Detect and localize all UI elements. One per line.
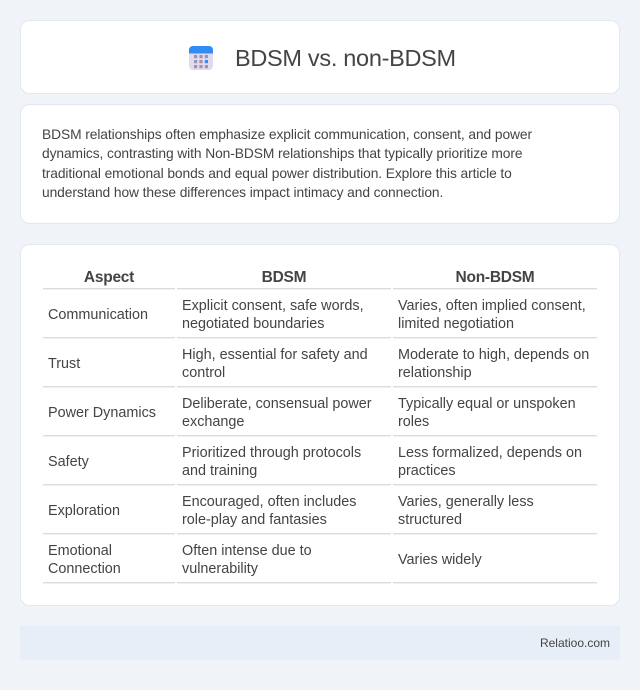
panel: table card [20,244,620,606]
comparison table: vulnerability [182,561,258,577]
comparison table [43,269,597,584]
header: Non-BDSM: Non-BDSM [456,269,534,286]
comparison table: Often intense due to [182,543,312,559]
intro text [42,127,532,200]
title: BDSM vs. non-BDSM [235,45,456,71]
header: Aspect: Aspect [84,269,134,286]
comparison table: Varies widely [398,552,482,568]
footer text: Relatioo.com [540,636,610,650]
comparison table: control [182,365,225,381]
comparison table: Varies, often implied consent, [398,298,586,314]
row: Power Dynamics: Power Dynamics [48,405,156,421]
panel: intro [20,104,620,224]
comparison table: negotiated boundaries [182,316,324,332]
intro text: traditional emotional bonds and equal power distribution. Explore this article to [42,166,512,181]
header: BDSM: BDSM [262,269,306,286]
row: Emotional Connection: Emotional [48,543,112,559]
intro text: dynamics, contrasting with Non-BDSM relationships that typically prioritize more [42,146,522,161]
panel: title card [20,20,620,94]
comparison table: Explicit consent, safe words, [182,298,364,314]
comparison table: structured [398,512,462,528]
comparison table: exchange [182,414,244,430]
comparison table: Prioritized through protocols [182,445,361,461]
comparison table: practices [398,463,456,479]
comparison table: Encouraged, often includes [182,494,356,510]
comparison table: Varies, generally less [398,494,534,510]
footer bar [20,626,620,660]
row: Exploration: Exploration [48,503,120,519]
row: Emotional Connection: Connection [48,561,121,577]
comparison table: relationship [398,365,472,381]
comparison table: Typically equal or unspoken [398,396,576,412]
row: Communication: Communication [48,307,148,323]
comparison table: Less formalized, depends on [398,445,582,461]
row: Emotional Connection [48,543,121,577]
comparison table: limited negotiation [398,316,514,332]
icon: calendar [189,46,213,70]
intro text: understand how these differences impact intimacy and connection. [42,185,443,200]
row: Safety: Safety [48,454,89,470]
row: Trust: Trust [48,356,80,372]
comparison table: High, essential for safety and [182,347,368,363]
intro text: BDSM relationships often emphasize explicit communication, consent, and power [42,127,532,142]
comparison table: Moderate to high, depends on [398,347,589,363]
comparison table: roles [398,414,429,430]
comparison table: and training [182,463,257,479]
comparison table: role-play and fantasies [182,512,327,528]
comparison table: Deliberate, consensual power [182,396,372,412]
